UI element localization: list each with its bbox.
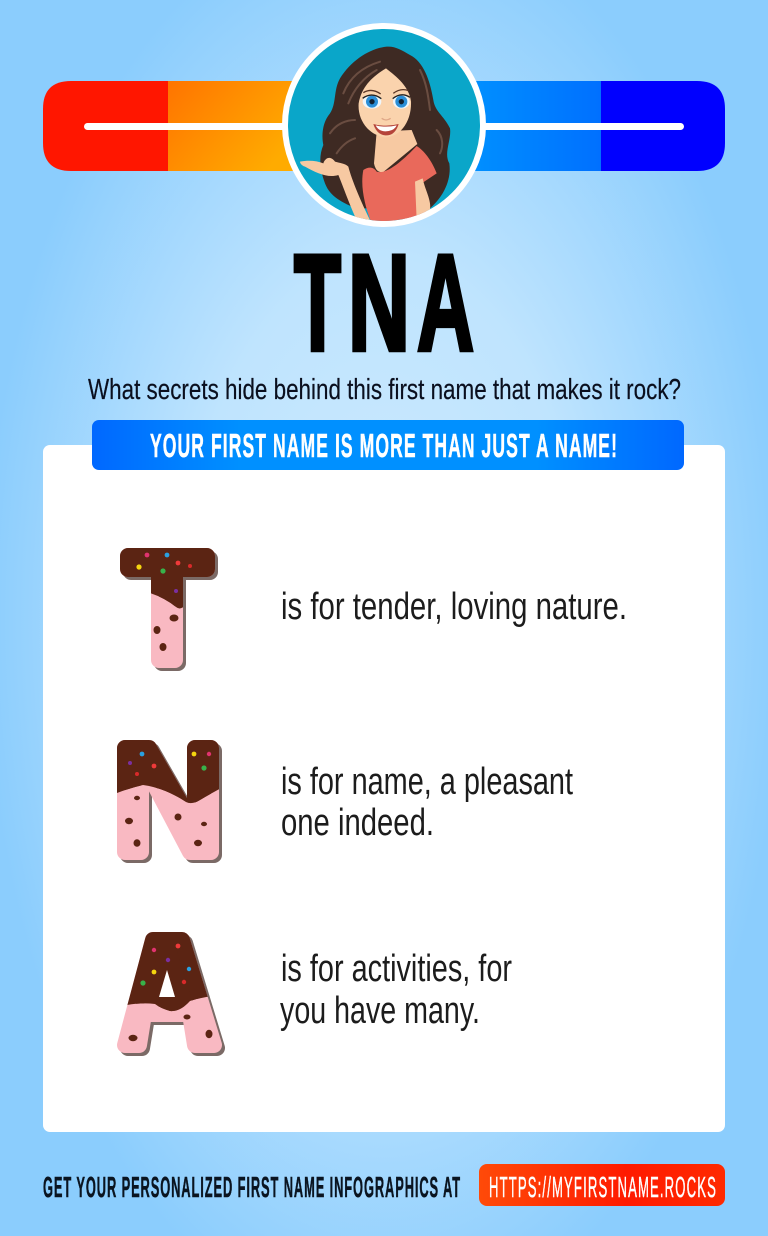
icon: chocolate letter T [128,553,210,663]
banner [92,420,684,470]
title: N [348,227,410,380]
avatar: woman in circle [285,26,483,224]
title: T [294,227,341,380]
text: A: is for activities, for [281,948,512,990]
text: N [281,761,573,844]
title [294,227,474,380]
footer url button [479,1164,725,1206]
text: N: one indeed. [281,802,434,844]
icon: chocolate letter N [125,748,214,855]
white content panel [43,445,725,1132]
icon: chocolate letter A [125,940,217,1048]
text: N: is for name, a pleasant [281,761,573,803]
header colour bar [43,81,725,171]
title: A [417,227,474,380]
text: T: is for tender, loving nature. [281,586,627,628]
text: A: you have many. [280,990,480,1032]
text: A [280,948,512,1032]
